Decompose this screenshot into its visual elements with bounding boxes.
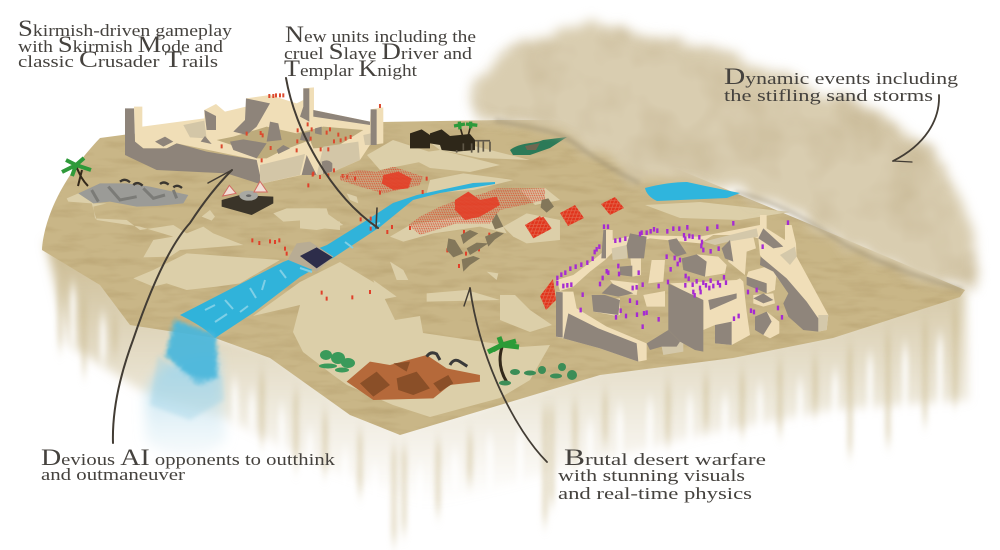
callout: new units: Templar Knight [284, 56, 417, 81]
light sand patches: central plain [300, 173, 560, 302]
siege engines [447, 198, 554, 272]
callout: skirmish gameplay: with Skirmish Mode and [18, 32, 224, 57]
callout: desert warfare: with stunning visuals [558, 466, 745, 485]
red army: loose formations [340, 167, 545, 235]
river [180, 182, 495, 338]
grey stone faces [125, 88, 377, 184]
city walls, cream [556, 215, 828, 362]
rocks: grey outcrop [78, 180, 188, 207]
palm trees: north [454, 122, 477, 136]
callout: skirmish gameplay [18, 16, 233, 72]
scattered red soldiers [252, 172, 489, 301]
huts: dark village [410, 129, 490, 153]
leader line: sand storms callout [893, 95, 939, 162]
castle wall tops [134, 87, 383, 184]
fortress: northwest castle [125, 87, 383, 184]
bridge ruin [288, 242, 333, 272]
fortress: southeast city [556, 215, 828, 362]
callout: new units: New units including the [285, 22, 476, 47]
inner courtyard [217, 127, 363, 158]
leader line: new units callout [286, 78, 378, 228]
callout: dynamic events: the stifling sand storms [724, 86, 933, 105]
red army: dense formations [382, 172, 552, 238]
lake [645, 182, 740, 201]
bushes: south [499, 363, 577, 386]
palm tree: west [62, 158, 91, 186]
light sand patches: south and north [253, 135, 790, 417]
tan shaded faces [612, 228, 828, 355]
shaded tan walls [183, 121, 371, 184]
red army squares [525, 197, 624, 310]
grey faces [556, 228, 818, 362]
callout: desert warfare: and real-time physics [558, 484, 752, 503]
market: table and tents [222, 181, 273, 215]
palm tree: south [488, 337, 519, 384]
oasis green [510, 137, 567, 155]
city defenders [557, 220, 788, 329]
callout: desert warfare [558, 445, 766, 503]
callout: new units [284, 22, 476, 81]
bushes: near brown mesa [319, 350, 355, 372]
callout: new units: cruel Slave Driver and [284, 39, 473, 64]
sand storm [476, 25, 977, 290]
leader line: AI opponents callout [113, 170, 232, 443]
leader line: desert warfare callout [464, 288, 547, 462]
castle garrison [222, 93, 380, 179]
waterfall [145, 320, 226, 456]
callout: dynamic events: D ynamic events including [724, 64, 959, 89]
callout: AI opponents: Devious AI opponents to outthink [41, 445, 336, 470]
island terrain [42, 120, 965, 435]
callout: skirmish gameplay: Skirmish-driven gameplay [18, 16, 233, 41]
callout: dynamic events [724, 64, 959, 105]
callout: skirmish gameplay: classic Crusader Trails [18, 47, 218, 72]
light sand patches: west of river [67, 193, 340, 290]
callout: AI opponents [41, 445, 336, 484]
city buildings [593, 237, 779, 338]
rock: brown mesa [347, 353, 480, 400]
callout: desert warfare: B rutal desert warfare [564, 445, 766, 470]
sand drips below the island [45, 240, 968, 540]
callout: AI opponents: and outmaneuver [41, 465, 185, 484]
